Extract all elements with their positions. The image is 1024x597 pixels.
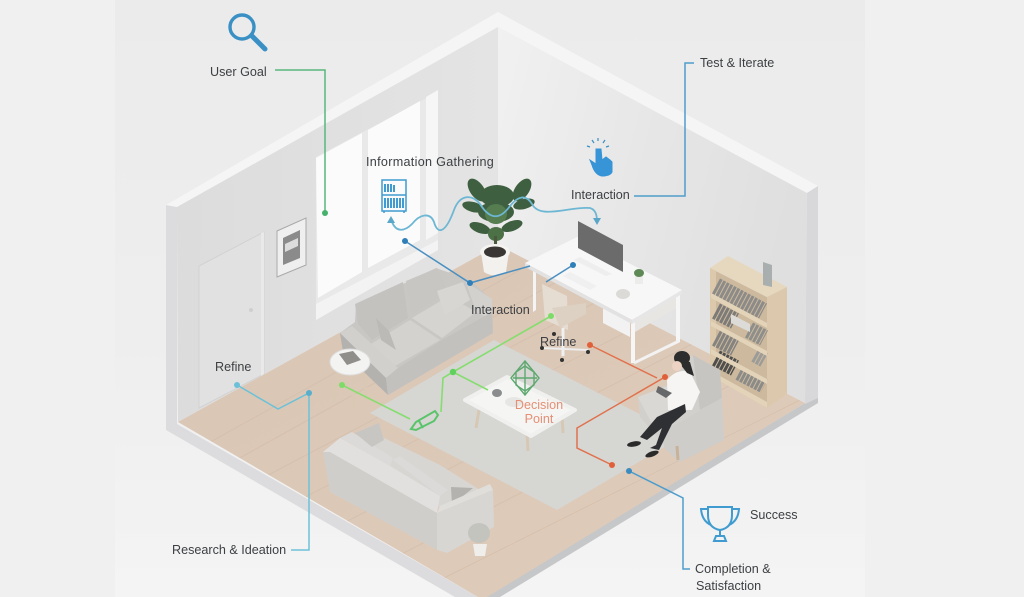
connector: completion: [626, 468, 690, 569]
right arm: [466, 282, 492, 320]
slab base: [166, 205, 478, 597]
connector: blue interaction path: [402, 238, 576, 286]
desk: [525, 221, 682, 363]
decision diamond icon: [511, 361, 539, 395]
connector: test and iterate: [634, 63, 694, 196]
pencil icon: [411, 411, 438, 430]
floor: [178, 245, 805, 597]
right arm: [437, 484, 493, 513]
bookshelf: [710, 256, 787, 408]
person: [667, 371, 700, 410]
back strip front: [323, 438, 440, 513]
label: completion and satisfaction: Completion &: [695, 562, 771, 576]
front face: [323, 452, 437, 550]
magnifier icon: [230, 15, 265, 49]
label: refine near chair: Refine: [540, 335, 576, 349]
shelves: [711, 293, 767, 328]
window: [316, 90, 438, 320]
left arm: [340, 326, 398, 378]
bookshelf icon: [382, 180, 406, 213]
wall top rim: [166, 12, 818, 207]
label: success: Success: [750, 508, 798, 522]
pillows: [355, 423, 384, 447]
connector: user goal: [275, 70, 328, 216]
floor planks: [211, 299, 800, 578]
label: information gathering: Information Gathering: [366, 155, 494, 169]
side table: [330, 349, 370, 408]
rug: [370, 340, 683, 510]
label: completion and satisfaction: Satisfaction: [696, 579, 761, 593]
trophy icon: [701, 507, 739, 541]
room shell: [166, 12, 818, 597]
desk chair: [540, 284, 590, 362]
back top strip: [340, 432, 393, 466]
sofa: front: [323, 423, 494, 553]
connector: green interaction path: [339, 313, 554, 419]
label: research and ideation: Research & Ideation: [172, 543, 286, 557]
right wall end: [805, 186, 818, 404]
door: [199, 232, 264, 408]
plant: [461, 175, 536, 276]
label: user goal: User Goal: [210, 65, 267, 79]
label: decision point: Point: [525, 412, 554, 426]
left wall: [177, 27, 498, 422]
right wall: [498, 27, 807, 403]
monitor: [578, 221, 623, 272]
small floor plant: [468, 523, 490, 556]
front face: [386, 312, 493, 395]
small desk plant: [635, 276, 643, 284]
label: decision point: Decision: [515, 398, 563, 412]
silhouette: [340, 268, 493, 395]
books: [716, 286, 764, 386]
armchair with person: [627, 351, 724, 462]
coffee table: [465, 377, 575, 451]
label: test and iterate: Test & Iterate: [700, 56, 774, 70]
picture frame: [277, 218, 306, 277]
connector: refine decision path: [577, 342, 668, 468]
sofa: rear: [340, 268, 493, 395]
label: interaction upper: Interaction: [571, 188, 630, 202]
pillows: [437, 282, 470, 315]
label: refine near door: Refine: [215, 360, 251, 374]
back cushions: [355, 282, 408, 340]
seat cushions: [371, 320, 440, 370]
label: interaction lower: Interaction: [471, 303, 530, 317]
connector: research and refine: [234, 382, 312, 550]
connector: information journey squiggle: [387, 197, 601, 230]
seat area: [360, 436, 480, 510]
infographic canvas: [166, 13, 818, 597]
hand tap icon: [587, 138, 612, 176]
